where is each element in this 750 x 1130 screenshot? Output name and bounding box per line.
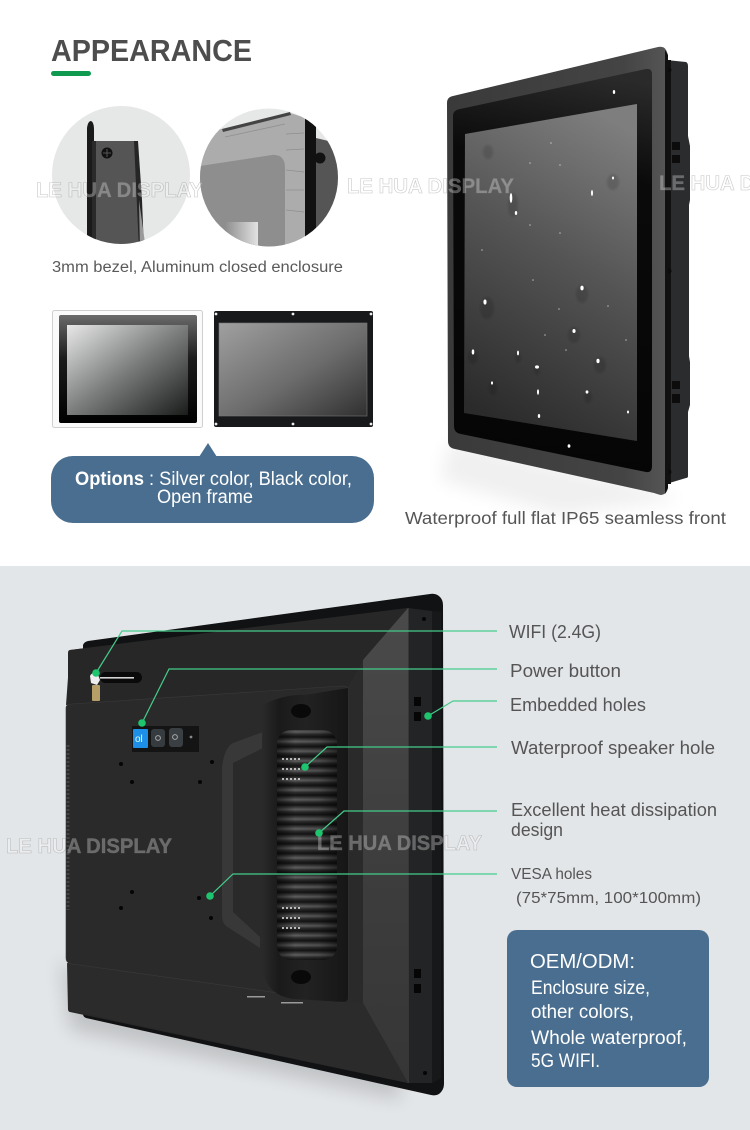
OEM list: Enclosure size,	[531, 978, 650, 999]
callout pointer	[199, 443, 217, 457]
panel background bottom	[0, 566, 750, 1130]
feature labels: Waterproof speaker hole	[511, 738, 715, 758]
vesa holes	[119, 760, 214, 920]
OEM list: other colors,	[531, 1002, 634, 1023]
inner raised bevel	[222, 732, 263, 948]
right bevel	[363, 608, 408, 1083]
left ridges	[66, 745, 70, 910]
bezel	[447, 47, 668, 495]
feature labels: WIFI (2.4G)	[509, 622, 601, 642]
caption: front: Waterproof full flat IP65 seamless front	[405, 508, 726, 528]
callout line: wifi	[92, 631, 497, 677]
rear housing	[666, 60, 690, 484]
feature labels: Excellent heat dissipation	[511, 800, 717, 820]
bottom ports	[247, 996, 303, 1004]
watermarks top	[36, 172, 750, 202]
callout line: heat	[315, 811, 497, 837]
option thumbnail: silver	[52, 310, 202, 428]
rear casing	[68, 608, 408, 1083]
heading text: APPEARANCE	[51, 33, 252, 68]
callout line: vesa	[206, 874, 497, 900]
feature labels: VESA holes	[511, 866, 592, 883]
feature labels: (75*75mm, 100*100mm)	[516, 890, 701, 907]
callout text: Options	[75, 468, 144, 490]
antenna	[90, 672, 142, 701]
black border	[453, 69, 652, 472]
feature labels: Embedded holes	[510, 695, 646, 715]
title	[51, 33, 252, 76]
feature labels	[509, 622, 717, 907]
panel: OEM/ODM	[507, 930, 709, 1087]
monitor shadow	[440, 440, 680, 515]
option thumbnail: open frame	[214, 311, 373, 427]
watermarks bottom: LE HUA DISPLAY	[6, 835, 172, 858]
callout line: embedded holes	[424, 701, 497, 720]
callouts lines and dots	[92, 631, 497, 900]
speaker housing	[262, 688, 348, 1002]
feature labels: Power button	[510, 661, 621, 681]
screen	[464, 104, 637, 441]
OEM list	[531, 978, 687, 1072]
detail photo: side bracket	[50, 104, 192, 250]
callout: options: Open frame	[157, 487, 253, 508]
mounting recesses	[291, 704, 311, 984]
front bezel edge	[83, 594, 444, 1095]
heat sink ridges	[277, 730, 337, 960]
rear shadow	[60, 960, 400, 1100]
heading underline	[51, 71, 91, 76]
side strip	[408, 608, 441, 1083]
button panel	[132, 726, 199, 752]
callout body	[51, 456, 374, 523]
callout: options: : Silver color, Black color,	[149, 469, 352, 490]
front monitor photo	[440, 47, 690, 515]
water drops	[468, 90, 629, 448]
callout: options	[51, 443, 374, 523]
side screw and slots	[414, 617, 427, 1075]
page background top	[0, 0, 750, 566]
top bevel	[66, 608, 408, 705]
watermarks bottom: LE HUA DISPLAY	[317, 832, 482, 855]
watermarks top: LE HUA DISPLAY	[347, 175, 514, 198]
watermarks bottom	[6, 832, 482, 858]
OEM list: Whole waterproof,	[531, 1028, 687, 1049]
detail photo: corner bezel	[200, 108, 338, 246]
feature labels: design	[511, 820, 563, 840]
OEM heading: OEM/ODM:	[530, 951, 635, 973]
OEM list: 5G WIFI.	[531, 1051, 600, 1072]
rear monitor photo	[60, 594, 444, 1100]
button panel: ol	[135, 734, 143, 745]
callout line: speaker	[301, 747, 497, 771]
watermarks top: LE HUA DISPLAY	[36, 179, 203, 202]
bottom bevel	[67, 963, 408, 1083]
callout line: power	[138, 669, 497, 727]
caption: bezel: 3mm bezel, Aluminum closed enclosure	[52, 259, 343, 276]
raised rear cover	[66, 686, 348, 1002]
side holes	[666, 68, 680, 474]
